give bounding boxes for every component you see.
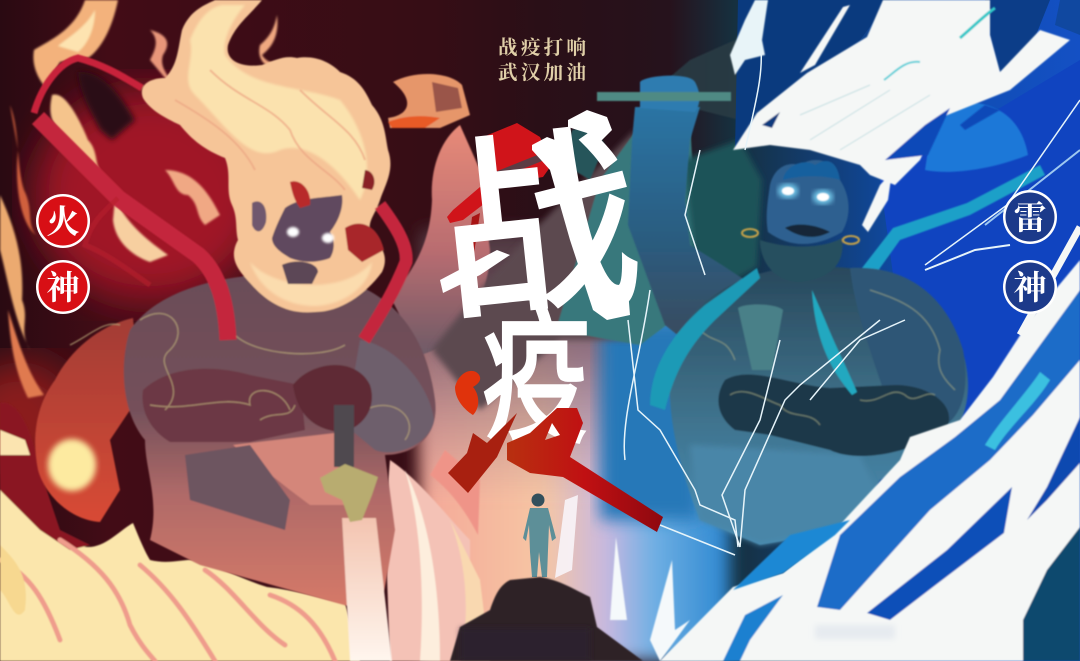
thunder god beard [760,238,843,282]
badge: fire god: 神 [46,270,80,307]
hair lines [175,70,365,190]
fire god right arm [345,340,434,452]
badge: fire god [36,260,90,314]
thunder god head [767,160,849,244]
blue gap: upper [817,290,1080,610]
cyan sash right [812,290,857,395]
calligraphy: white brush accents [440,110,630,320]
panel: fire god [34,0,490,661]
cyan arc [925,102,1028,172]
thunder god forearm [718,374,949,456]
badge: fire [36,194,90,248]
slogan: 武汉加油 [498,62,586,84]
rod [597,92,731,101]
red ribbons [34,58,406,340]
badge: thunder god [1003,260,1057,314]
flame hair [142,0,390,312]
panel: thunder god [597,76,1045,545]
thunder god raised arm [628,107,748,345]
thunder god torso [670,267,968,545]
thunder god fist [640,76,700,112]
mouth [785,225,830,237]
top right navy field [735,0,1080,150]
blue gap: right [1027,417,1080,520]
fire god left arm [35,318,140,522]
fist left glow [48,439,96,491]
blue gap: middle [867,487,1012,620]
lightning: diagonal white mass [660,260,1080,661]
beard highlight [250,262,372,306]
mace [738,304,783,370]
center pale streak [555,495,578,578]
head crest [783,161,840,180]
fire god forearm [142,369,305,442]
bottom watermark smear [460,625,895,661]
cyan shoulder sash [862,165,1045,275]
robe folds [185,445,290,530]
eyes [287,227,334,243]
raised hand flames [388,74,470,128]
lightning: top white mass [730,0,1070,232]
slogan [498,37,586,84]
red brow paint [290,181,310,208]
thunder god eyes [778,184,833,204]
armour lines [700,290,955,425]
cyan gap arc [985,372,1050,450]
lightning: thin bolts [624,40,1080,555]
calligraphy title [430,109,648,462]
fire god mask [272,195,342,262]
mouth [282,261,318,284]
flames: upper left [0,0,290,398]
armour pattern [70,313,409,440]
slogan: 战疫打响 [498,37,586,59]
red hair shadows at cheek [345,224,384,262]
hair highlights [188,5,367,200]
sword guard [320,464,378,522]
badge: fire: 火 [46,205,80,241]
title character: zhan: 战 [430,109,648,348]
fire god torso [124,274,436,615]
flames: bottom left [0,403,490,661]
fire god hands on sword [293,365,372,432]
blue gap: lower [723,595,783,661]
badge: thunder god: 神 [1014,270,1046,307]
fire god belly [233,433,345,505]
belly [690,445,880,545]
calligraphy: red accents [447,123,573,260]
panel: center diagonal bands [432,40,762,410]
shoulder armour [850,268,966,425]
dark corner [1023,527,1080,661]
badge: thunder [1003,190,1057,244]
cyan sash left [650,268,760,410]
figure in protective suit [523,494,556,577]
dark hollow inside ribbon [78,72,135,140]
badge: thunder: 雷 [1014,200,1046,237]
rock [450,577,643,661]
sword blade [342,518,392,661]
sword handle [334,405,354,467]
cheek patch [252,201,266,231]
fire god raised arm [392,125,490,355]
lower blue fields [610,520,850,661]
calligraphy: red brush strokes [448,371,663,532]
title character: yi: 疫 [482,298,590,462]
earrings [742,229,859,244]
